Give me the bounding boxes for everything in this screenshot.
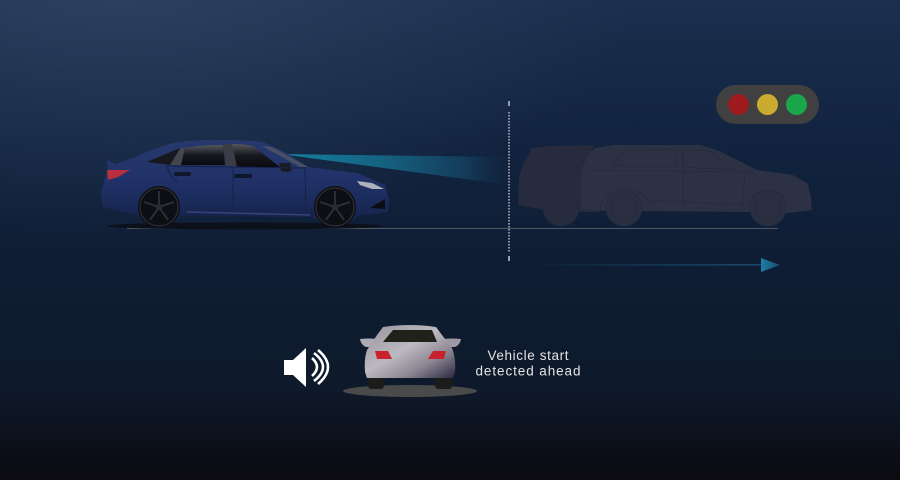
C pillar xyxy=(170,148,185,165)
ground shadow xyxy=(343,385,477,397)
car body xyxy=(365,325,455,378)
door handles xyxy=(174,172,191,176)
front grille xyxy=(370,199,385,209)
rear window xyxy=(383,330,437,342)
mirror xyxy=(279,163,292,172)
rear door window xyxy=(181,145,225,165)
ghosted vehicle ahead: moved-off position xyxy=(581,145,812,226)
caption: detected ahead xyxy=(476,364,580,378)
front door window xyxy=(232,144,280,167)
speaker icon xyxy=(284,348,328,387)
red light xyxy=(728,94,749,115)
caption: Vehicle start xyxy=(488,348,569,363)
body crease lines xyxy=(166,166,306,212)
tires xyxy=(368,376,384,389)
windscreen xyxy=(262,146,308,167)
rear view car icon xyxy=(343,325,477,397)
car shadow xyxy=(107,222,383,230)
green light xyxy=(786,94,807,115)
B pillar xyxy=(223,144,237,166)
car body xyxy=(101,140,389,225)
traffic light xyxy=(716,85,819,124)
rear quarter window xyxy=(147,148,180,165)
yellow light xyxy=(757,94,778,115)
headlight xyxy=(357,181,384,189)
detection boundary dashed line xyxy=(508,101,510,261)
side mirrors xyxy=(360,338,377,347)
own car: blue sedan side view xyxy=(101,140,389,228)
ghosted vehicle ahead: starting position xyxy=(518,145,600,226)
front wheel xyxy=(314,186,356,228)
right tail light xyxy=(428,351,446,359)
rear wheel xyxy=(138,186,180,228)
left tail light xyxy=(375,351,392,359)
ground line xyxy=(127,228,778,229)
direction arrow xyxy=(530,258,780,272)
sensor beam xyxy=(280,154,510,185)
tail light xyxy=(107,170,130,180)
